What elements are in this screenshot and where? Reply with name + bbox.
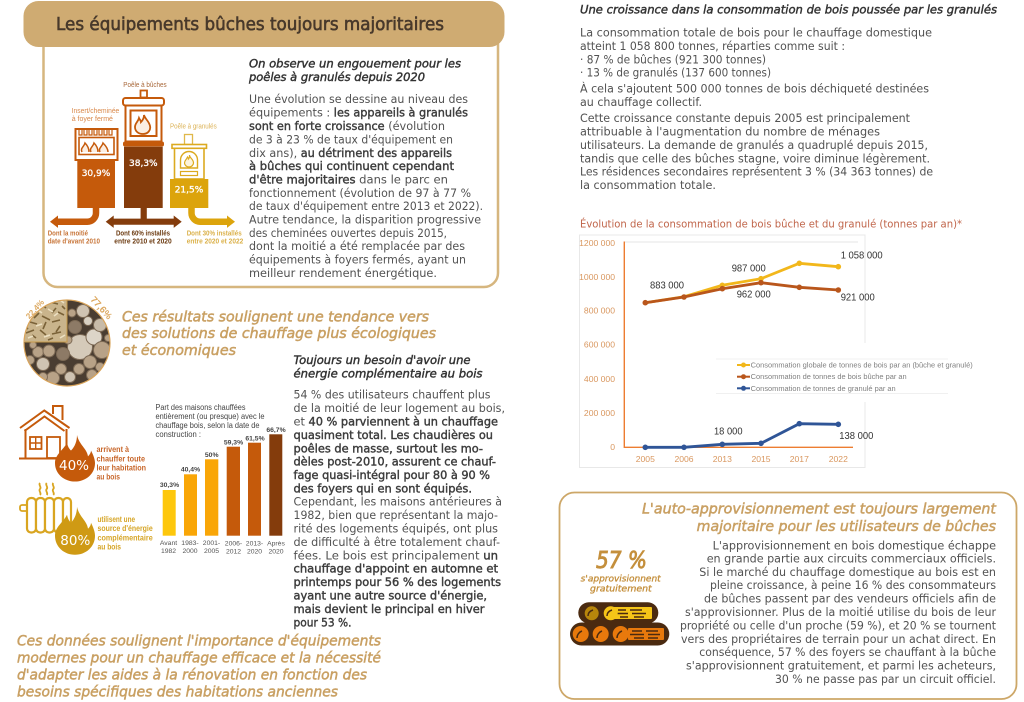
text block: engouement granulés: équipements : les appareils à granulés: [249, 106, 468, 120]
text block: croissance consommation: Les résidences secondaires représentent 3 % (34 363 tonnes) de: [580, 166, 933, 179]
text block: croissance consommation: tandis que celle des bûches stagne, voire diminue légèrement.: [580, 152, 930, 166]
x axis labels: 2005: [636, 454, 655, 464]
callout: équipements modernes: modernes pour un chauffage efficace et la nécessité: [17, 650, 381, 666]
callout: tendance écologique: des solutions de chauffage plus écologiques: [122, 326, 436, 342]
text: source complémentaire: au bois: [98, 542, 121, 552]
text block: besoin complémentaire: Toujours un besoin d'avoir une: [294, 354, 471, 367]
stat: 57 %: s'approvisionnent: [581, 574, 661, 584]
photo: pellets and logs circle: 22,4%: [24, 298, 46, 321]
text block: engouement granulés: de 3 à 23 % de taux d'équipement en: [249, 134, 453, 146]
text: arrivent à chauffer: arrivent à: [96, 445, 129, 454]
text block: approvisionnement: 30 % ne passe pas par un circuit officiel.: [775, 673, 996, 686]
icon: pellet stove: 21,5%: [175, 186, 204, 196]
series: granulés: [642, 421, 841, 450]
text block: approvisionnement: Si le marché du chauffage domestique au bois est en: [699, 566, 996, 579]
icon: logs: [570, 602, 669, 646]
series: total: [645, 260, 841, 303]
text block: engouement granulés: meilleur rendement énergétique.: [249, 267, 437, 280]
category labels: Après: [267, 540, 285, 548]
arrow: middle: [106, 208, 182, 228]
text block: engouement granulés: des cheminées ouvertes depuis 2015,: [249, 227, 447, 240]
data labels: [650, 251, 883, 442]
text block: croissance consommation: la consommation totale.: [580, 179, 716, 192]
text block: besoin complémentaire: rité des logements équipés, ont plus: [294, 522, 498, 536]
captions: [48, 231, 243, 246]
y axis labels: 800 000: [584, 306, 615, 316]
icon: log stove: Poêle à bûches: [123, 82, 167, 89]
text block: croissance consommation: · 13 % de granulés (137 600 tonnes): [580, 67, 771, 80]
y axis labels: 0: [610, 442, 615, 452]
text block: engouement granulés: dont la moitié a été remplacée par des: [249, 240, 465, 253]
value labels: 66,7%: [266, 427, 286, 434]
text block: croissance consommation: atteint 1 058 800 tonnes, réparties comme suit :: [580, 40, 845, 53]
text block: approvisionnement: [680, 540, 997, 686]
icon: house 40%: 40%: [59, 458, 89, 474]
text block: croissance consommation: À cela s'ajoutent 500 000 tonnes de bois déchiqueté destinées: [580, 83, 929, 96]
chart title: construction :: [156, 430, 201, 439]
text block: besoin complémentaire: pour 53 %.: [294, 616, 352, 630]
callout: équipements modernes: [17, 634, 381, 700]
icon: radiator 80%: [20, 483, 95, 555]
text block: croissance consommation: utilisateurs. La demande de granulés a quadruplé depuis 2015,: [580, 139, 928, 152]
captions: Dont la moitié: [48, 231, 88, 238]
value labels: 30,3%: [160, 482, 179, 489]
chart title: Part des maisons chauffées: [156, 403, 246, 412]
text block: engouement granulés: dix ans), au détriment des appareils: [249, 147, 452, 160]
panel: équipements bûches: [24, 1, 504, 287]
bars: [163, 434, 282, 536]
data labels: 138 000: [839, 431, 873, 442]
text: source complémentaire: utilisent une: [98, 515, 135, 524]
data labels: 962 000: [737, 289, 771, 300]
panel frame: [44, 40, 498, 287]
stat: 57 %: 57 %: [596, 548, 647, 574]
icon: log stove: [123, 82, 167, 208]
text block: approvisionnement: s'approvisionnent gratuitement, et parmi les acheteurs,: [686, 660, 996, 672]
text block: engouement granulés: sont en forte croissance (évolution: [249, 120, 445, 133]
icon: log stove: 38,3%: [129, 159, 158, 169]
text: arrivent à chauffer: chauffer toute: [96, 454, 145, 464]
legend: Consommation globale de tonnes de bois par an (bûche et granulé): [751, 362, 973, 370]
stat: 57 %: [581, 548, 661, 594]
icon: pellet stove: Poêle à granulés: [170, 124, 217, 130]
value labels: 50%: [205, 452, 219, 459]
axes: [624, 242, 853, 447]
text block: croissance consommation: attribuable à l'augmentation du nombre de ménages: [580, 126, 880, 139]
title banner: Les équipements bûches toujours majoritaires: [56, 15, 444, 35]
chart frame: [580, 235, 865, 468]
icon: house 40%: [19, 406, 95, 482]
text block: besoin complémentaire: énergie complémentaire au bois: [294, 368, 483, 380]
text block: approvisionnement: de bûches passent par des vendeurs officiels afin de: [704, 592, 996, 606]
text block: besoin complémentaire: [294, 354, 505, 630]
y axis labels: [579, 238, 615, 452]
icon: radiator 80%: 80%: [60, 533, 90, 549]
category labels: 2006-: [225, 540, 242, 548]
text block: engouement granulés: fonctionnement (évolution de 97 à 77 %: [249, 187, 471, 200]
text block: besoin complémentaire: printemps pour 56 % des logements: [294, 576, 501, 589]
heading: [642, 502, 997, 535]
heading: L'auto-approvisionnement est toujours largement: [642, 502, 997, 518]
category labels: 2000: [182, 548, 198, 555]
series: bûches: [642, 280, 841, 306]
data labels: 921 000: [841, 293, 875, 304]
text block: croissance consommation: [580, 4, 997, 192]
text block: engouement granulés: Autre tendance, la disparition progressive: [249, 214, 481, 226]
category labels: 2012: [226, 548, 241, 556]
category labels: 1982: [161, 548, 176, 555]
data labels: 1 058 000: [841, 251, 883, 262]
value labels: 61,5%: [245, 436, 265, 442]
text block: approvisionnement: s'approvisionner. Plus de la moitié utilise du bois de leur: [685, 606, 996, 619]
value labels: [160, 427, 286, 489]
callout: tendance écologique: et économiques: [122, 343, 236, 359]
text block: besoin complémentaire: dèles post-2010, assurent ce chauf-: [294, 456, 496, 468]
line chart: consommation de bois: [579, 218, 987, 468]
text block: approvisionnement: vers des propriétaires de terrain pour un achat direct. En: [681, 633, 996, 646]
category labels: 2005: [204, 548, 219, 555]
value labels: 59,3%: [224, 440, 243, 446]
text block: engouement granulés: On observe un engouement pour les: [249, 58, 461, 70]
text block: croissance consommation: La consommation totale de bois pour le chauffage domestique: [580, 27, 932, 40]
legend: [713, 343, 987, 402]
text block: engouement granulés: d'être majoritaires dans le parc en: [249, 174, 448, 186]
text block: approvisionnement: L'approvisionnement en bois domestique échappe: [713, 540, 996, 552]
y axis labels: 600 000: [584, 340, 615, 350]
category labels: 2001-: [203, 540, 220, 547]
text: arrivent à chauffer: leur habitation: [96, 464, 146, 472]
x axis labels: 2013: [713, 454, 732, 464]
text block: approvisionnement: en grande partie aux circuits commerciaux officiels.: [707, 552, 996, 566]
legend: Consommation de tonnes de granulé par an: [751, 386, 896, 393]
callout: équipements modernes: besoins spécifiques des habitations anciennes: [17, 684, 338, 700]
category labels: 2013-: [246, 540, 263, 548]
text block: besoin complémentaire: quasiment total. Les chaudières ou: [294, 429, 493, 442]
y axis labels: 1000 000: [579, 272, 615, 282]
text block: croissance consommation: · 87 % de bûches (921 300 tonnes): [580, 54, 766, 66]
chart title: Évolution de la consommation de bois bûche et du granulé (tonnes par an)*: [580, 218, 962, 231]
panel: auto-approvisionnement: [560, 492, 1016, 699]
text block: engouement granulés: à bûches qui continuent cependant: [249, 160, 455, 173]
x axis labels: 2006: [674, 454, 694, 464]
text: source complémentaire: [98, 515, 153, 552]
text block: besoin complémentaire: fage quasi-intégral pour 80 à 90 %: [294, 469, 490, 482]
captions: Dont 30% installés: [187, 231, 242, 238]
data labels: 18 000: [714, 426, 743, 437]
callout: tendance écologique: Ces résultats soulignent une tendance vers: [122, 310, 429, 326]
text block: approvisionnement: conséquence, 57 % des foyers se chauffant à la bûche: [699, 646, 996, 659]
y axis labels: 200 000: [584, 408, 615, 418]
x axis labels: [636, 454, 848, 464]
photo: pellets and logs circle: 77,6%: [88, 295, 114, 322]
data labels: 987 000: [732, 264, 766, 275]
icon: pellet stove: [170, 124, 217, 208]
text block: besoin complémentaire: chauffage d'appoint en automne et: [294, 562, 499, 576]
text block: approvisionnement: pleine croissance, à peine 16 % des consommateurs: [710, 579, 996, 592]
text block: croissance consommation: Cette croissance constante depuis 2005 est principalement: [580, 112, 911, 125]
text block: besoin complémentaire: Cependant, les maisons antérieures à: [294, 496, 502, 508]
captions: entre 2020 et 2022: [187, 239, 243, 246]
x axis labels: 2022: [829, 454, 848, 464]
stat: 57 %: gratuitement: [590, 584, 652, 594]
text block: besoin complémentaire: fées. Le bois est principalement un: [294, 550, 498, 562]
infographic: stove types: [48, 82, 243, 246]
category labels: Avant: [160, 540, 177, 547]
icon: insert stove: [72, 108, 119, 208]
y axis labels: 400 000: [584, 374, 615, 384]
text block: croissance consommation: au chauffage collectif.: [580, 96, 702, 109]
icon: insert stove: Insert/cheminée: [72, 108, 119, 115]
category labels: [160, 540, 285, 556]
text block: besoin complémentaire: mais devient le principal en hiver: [294, 603, 485, 616]
value labels: 40,4%: [181, 466, 200, 474]
text block: besoin complémentaire: des foyers qui en sont équipés.: [294, 482, 472, 496]
y axis labels: 1200 000: [579, 238, 615, 248]
panel frame: [560, 492, 1016, 699]
x axis labels: 2015: [751, 454, 771, 464]
legend: Consommation de tonnes de bois bûche par an: [751, 374, 907, 381]
captions: Dont 60% installés: [116, 231, 170, 238]
text block: besoin complémentaire: 54 % des utilisateurs chauffent plus: [294, 388, 491, 402]
x axis labels: 2017: [790, 454, 809, 464]
callout: équipements modernes: d'adapter les aides à la rénovation en fonction des: [17, 668, 367, 684]
text: arrivent à chauffer: [96, 445, 146, 482]
icon: insert stove: à foyer fermé: [72, 116, 113, 123]
text block: engouement granulés: poêles à granulés depuis 2020: [248, 71, 425, 84]
text block: besoin complémentaire: de difficulté à être totalement chauf-: [294, 536, 500, 549]
text block: besoin complémentaire: de la moitié de leur logement au bois,: [294, 402, 505, 415]
text block: croissance consommation: Une croissance dans la consommation de bois poussée par les granulés: [580, 4, 997, 17]
callout: tendance écologique: [122, 310, 436, 359]
text: source complémentaire: complémentaire: [98, 534, 153, 542]
text block: approvisionnement: propriété ou celle d'un proche (59 %), et 20 % se tournent: [680, 620, 997, 632]
chart title: [156, 403, 264, 439]
text block: besoin complémentaire: 1982, bien que représentant la majo-: [294, 509, 498, 522]
captions: entre 2010 et 2020: [114, 239, 172, 246]
text block: engouement granulés: de taux d'équipement entre 2013 et 2022).: [249, 200, 483, 213]
title banner: [24, 1, 504, 47]
text block: engouement granulés: équipements à foyers fermés, ayant un: [249, 254, 466, 266]
bar chart: date de construction: [156, 403, 286, 556]
data labels: 883 000: [650, 281, 684, 292]
chart title: entièrement (ou presque) avec le: [156, 412, 264, 421]
category labels: 2020: [268, 548, 284, 556]
captions: date d'avant 2010: [48, 239, 100, 246]
callout: équipements modernes: Ces données soulignent l'importance d'équipements: [17, 634, 381, 650]
text block: besoin complémentaire: et 40 % parviennent à un chauffage: [294, 416, 498, 428]
chart title: chauffage bois, selon la date de: [156, 421, 260, 430]
arrow: right: [192, 208, 235, 228]
photo: pellets and logs circle: [20, 295, 114, 390]
heading: majoritaire pour les utilisateurs de bûches: [697, 519, 996, 535]
text block: besoin complémentaire: ayant une autre source d'énergie,: [294, 590, 487, 602]
text block: engouement granulés: Une évolution se dessine au niveau des: [249, 93, 468, 106]
text: source complémentaire: source d'énergie: [98, 524, 153, 533]
icon: insert stove: 30,9%: [82, 169, 111, 179]
text block: besoin complémentaire: poêles de masse, surtout les mo-: [294, 442, 483, 456]
category labels: 2020: [247, 548, 262, 556]
arrow: left: [50, 208, 96, 228]
text block: engouement granulés: [248, 58, 483, 280]
text: arrivent à chauffer: au bois: [96, 472, 120, 482]
category labels: 1983-: [181, 540, 199, 547]
